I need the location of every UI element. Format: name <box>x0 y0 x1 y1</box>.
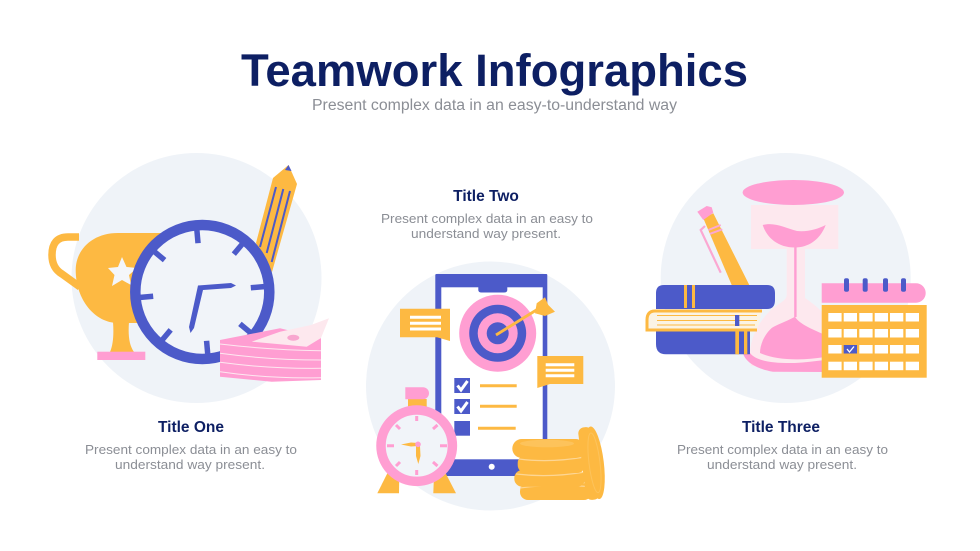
callout: left bubble <box>400 309 450 341</box>
icon: pen <box>697 206 749 285</box>
icon: pencil <box>256 165 297 272</box>
icon: trophy <box>52 233 170 360</box>
panel: title two <box>366 188 615 510</box>
heading: title two: Title Two <box>453 188 519 205</box>
icon: clock <box>135 225 269 359</box>
heading: title one: Title One <box>158 419 224 436</box>
icon: calendar <box>822 278 927 378</box>
background circle three <box>661 153 911 403</box>
heading: title three: Title Three <box>742 419 820 436</box>
icon: money stack <box>220 318 329 382</box>
icon: target <box>459 295 555 372</box>
text: description two: Present complex data in an easy to <box>381 212 593 226</box>
text: description one: understand way present. <box>115 458 265 472</box>
subtitle: Present complex data in an easy-to-understand way <box>312 97 677 114</box>
text: description three: Present complex data in an easy to <box>677 443 888 457</box>
icon: coins <box>512 425 608 501</box>
panel: title three <box>647 153 927 472</box>
icon: hourglass <box>743 180 844 372</box>
background circle two <box>366 262 615 510</box>
callout: right bubble <box>537 356 583 388</box>
icon: stopwatch <box>377 387 456 493</box>
panel: title one <box>52 153 329 472</box>
icon: phone <box>435 274 547 476</box>
icon: books <box>647 285 775 354</box>
title: Teamwork Infographics <box>241 45 748 96</box>
text: description two: understand way present. <box>411 227 561 241</box>
background circle one <box>72 153 322 403</box>
text: description three: understand way present. <box>707 458 857 472</box>
text: description one: Present complex data in an easy to <box>85 443 297 457</box>
checklist <box>454 378 517 436</box>
